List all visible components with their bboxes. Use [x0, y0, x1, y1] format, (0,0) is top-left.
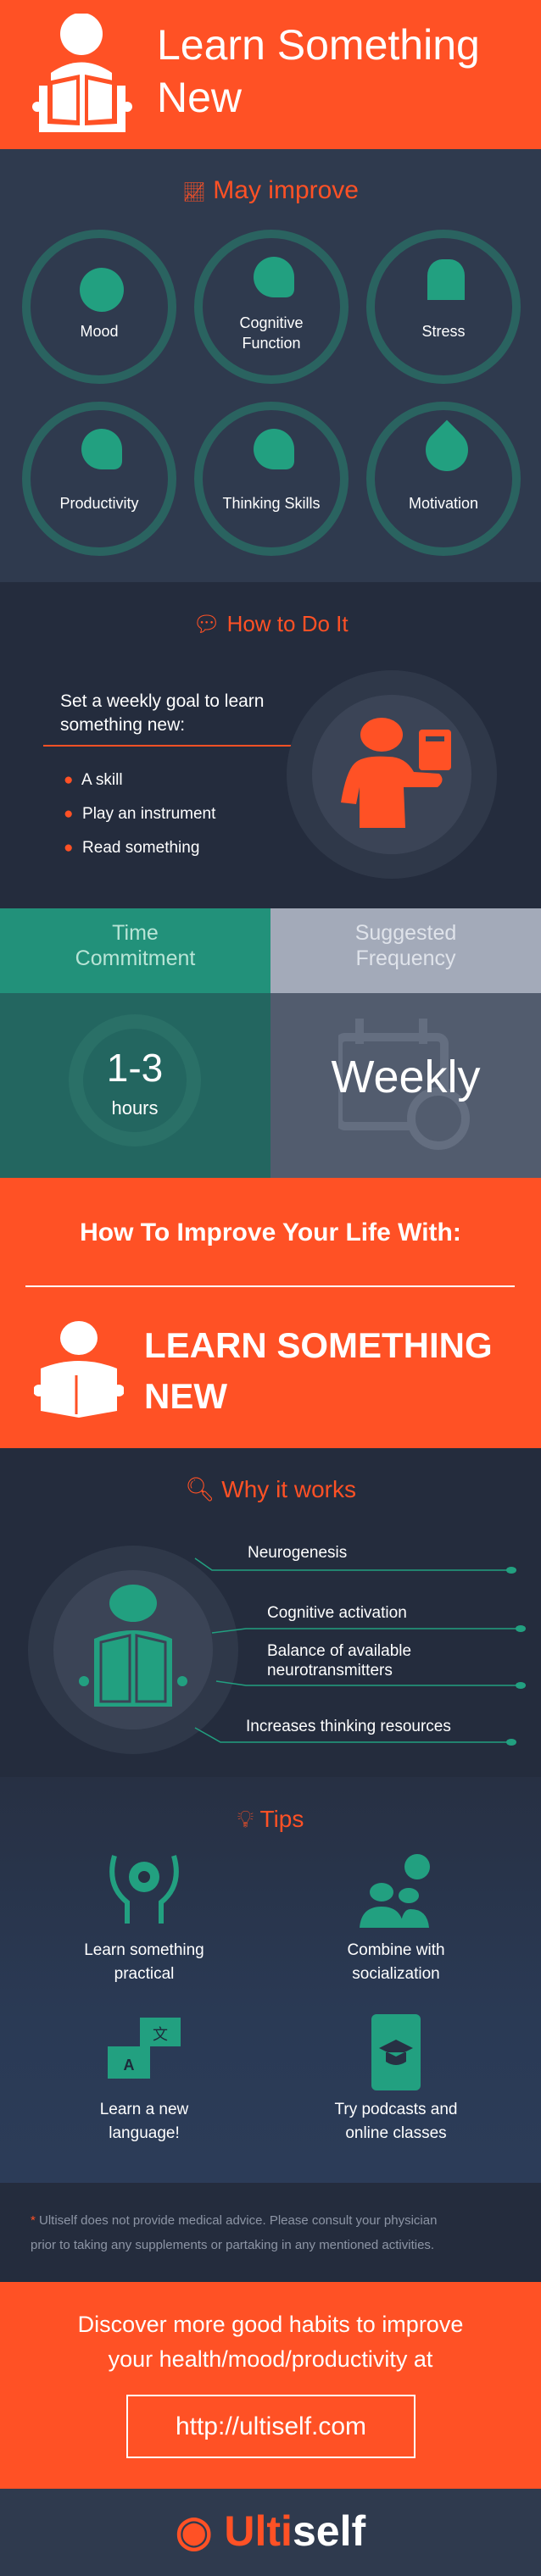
- clock with value: hours: [111, 1097, 159, 1119]
- tip: language: [100, 2018, 188, 2142]
- benefit: productivity: Productivity: [59, 495, 139, 512]
- panel: suggested frequency: Suggested: [355, 921, 456, 945]
- benefit: productivity: [22, 402, 176, 556]
- title: [157, 21, 480, 121]
- tip: language: Learn a new: [100, 2101, 188, 2118]
- tip: practical: [84, 1855, 204, 1983]
- disclaimer: [31, 2213, 437, 2252]
- disclaimer: * Ultiself does not provide medical advice. Please consult your physician: [31, 2213, 437, 2228]
- panel: time commitment: Time: [112, 921, 159, 945]
- panel: time commitment: Commitment: [75, 947, 195, 970]
- benefit: cognitive function: [194, 230, 349, 384]
- title: learn something new: NEW: [144, 1376, 227, 1416]
- heading: why it works: 🔍︎ Why it works: [185, 1476, 356, 1502]
- text: goal: [60, 691, 264, 735]
- tip: podcasts: online classes: [345, 2124, 447, 2142]
- panel: why it works: Cognitive activation: [267, 1604, 407, 1622]
- benefit: mood: [22, 230, 176, 384]
- tip: language: 文: [153, 2023, 168, 2045]
- panel: may improve: [0, 149, 541, 582]
- benefit: mood: Mood: [80, 323, 119, 340]
- benefit: thinking skills: [194, 402, 349, 556]
- icon: person holding book: [287, 670, 497, 879]
- benefit: cognitive function: Cognitive: [239, 314, 304, 331]
- value: weekly: Weekly: [331, 1052, 481, 1102]
- heading: how to do it: 💬︎ How to Do It: [192, 611, 349, 636]
- title: Learn Something: [157, 21, 480, 69]
- text: goal: something new:: [60, 715, 185, 735]
- bullet list: ● Read something: [64, 839, 199, 857]
- panel: why it works: neurotransmitters: [267, 1662, 393, 1679]
- heading: how to improve: How To Improve Your Life With:: [80, 1219, 461, 1246]
- panel: call to action: [0, 2282, 541, 2489]
- benefit: stress: Stress: [421, 323, 465, 340]
- panel: how to improve banner: [0, 1178, 541, 1448]
- benefit: motivation: Motivation: [409, 495, 478, 512]
- icon: reader: [34, 1321, 124, 1418]
- heading: tips: 💡︎ Tips: [237, 1806, 304, 1832]
- tip: socialization: [347, 1854, 445, 1983]
- bullet list: [64, 771, 215, 857]
- panel: how to do it: [0, 582, 541, 908]
- tip: language: language!: [109, 2124, 180, 2142]
- connector lines: [195, 1557, 526, 1746]
- benefit: cognitive function: Function: [242, 335, 301, 352]
- tip: socialization: Combine with: [347, 1941, 445, 1959]
- reason list: Neurogenesis: [248, 1544, 347, 1562]
- bullet list: ● A skill: [64, 771, 123, 789]
- benefit: thinking skills: Thinking Skills: [222, 495, 321, 512]
- benefit: stress: [366, 230, 521, 384]
- clock with value: 1-3: [107, 1046, 163, 1090]
- title: New: [157, 74, 242, 121]
- header panel: [0, 0, 541, 149]
- panel: why it works: [0, 1448, 541, 1777]
- disclaimer: prior to taking any supplements or partaking in any mentioned activities.: [31, 2238, 434, 2252]
- tip: podcasts: [334, 2014, 458, 2142]
- tip: practical: practical: [114, 1965, 174, 1983]
- cta text: [78, 2312, 463, 2372]
- tip: socialization: socialization: [352, 1965, 440, 1983]
- cta text: Discover more good habits to improve: [78, 2312, 463, 2337]
- panel: why it works: Balance of available: [267, 1642, 411, 1660]
- panel: suggested frequency: Frequency: [355, 947, 456, 970]
- panel: suggested frequency: [270, 908, 541, 1178]
- text: goal: Set a weekly goal to learn: [60, 691, 264, 711]
- title: learn something new: LEARN SOMETHING: [144, 1325, 493, 1365]
- icon: teal reader circle: [28, 1546, 238, 1754]
- title: learn something new: [144, 1325, 493, 1416]
- footer: [0, 2489, 541, 2576]
- panel: time commitment: [0, 908, 270, 1178]
- cta text: your health/mood/productivity at: [109, 2346, 432, 2372]
- url box: [126, 2395, 416, 2458]
- tip: podcasts: Try podcasts and: [334, 2101, 458, 2118]
- benefit: motivation: [366, 402, 521, 556]
- bullet list: ● Play an instrument: [64, 805, 215, 823]
- url box: http://ultiself.com: [176, 2412, 366, 2440]
- icon: reader with book: [32, 14, 132, 132]
- heading: may improve: 📈︎ May improve: [182, 176, 359, 204]
- logo: ◉ Ultiself: [176, 2507, 365, 2555]
- tip: language: A: [124, 2057, 134, 2074]
- clock with value: [69, 1014, 201, 1146]
- panel: why it works: Increases thinking resources: [246, 1718, 451, 1735]
- icon: calendar: [338, 1019, 470, 1150]
- tip: practical: Learn something: [84, 1941, 204, 1959]
- panel: tips: [0, 1777, 541, 2183]
